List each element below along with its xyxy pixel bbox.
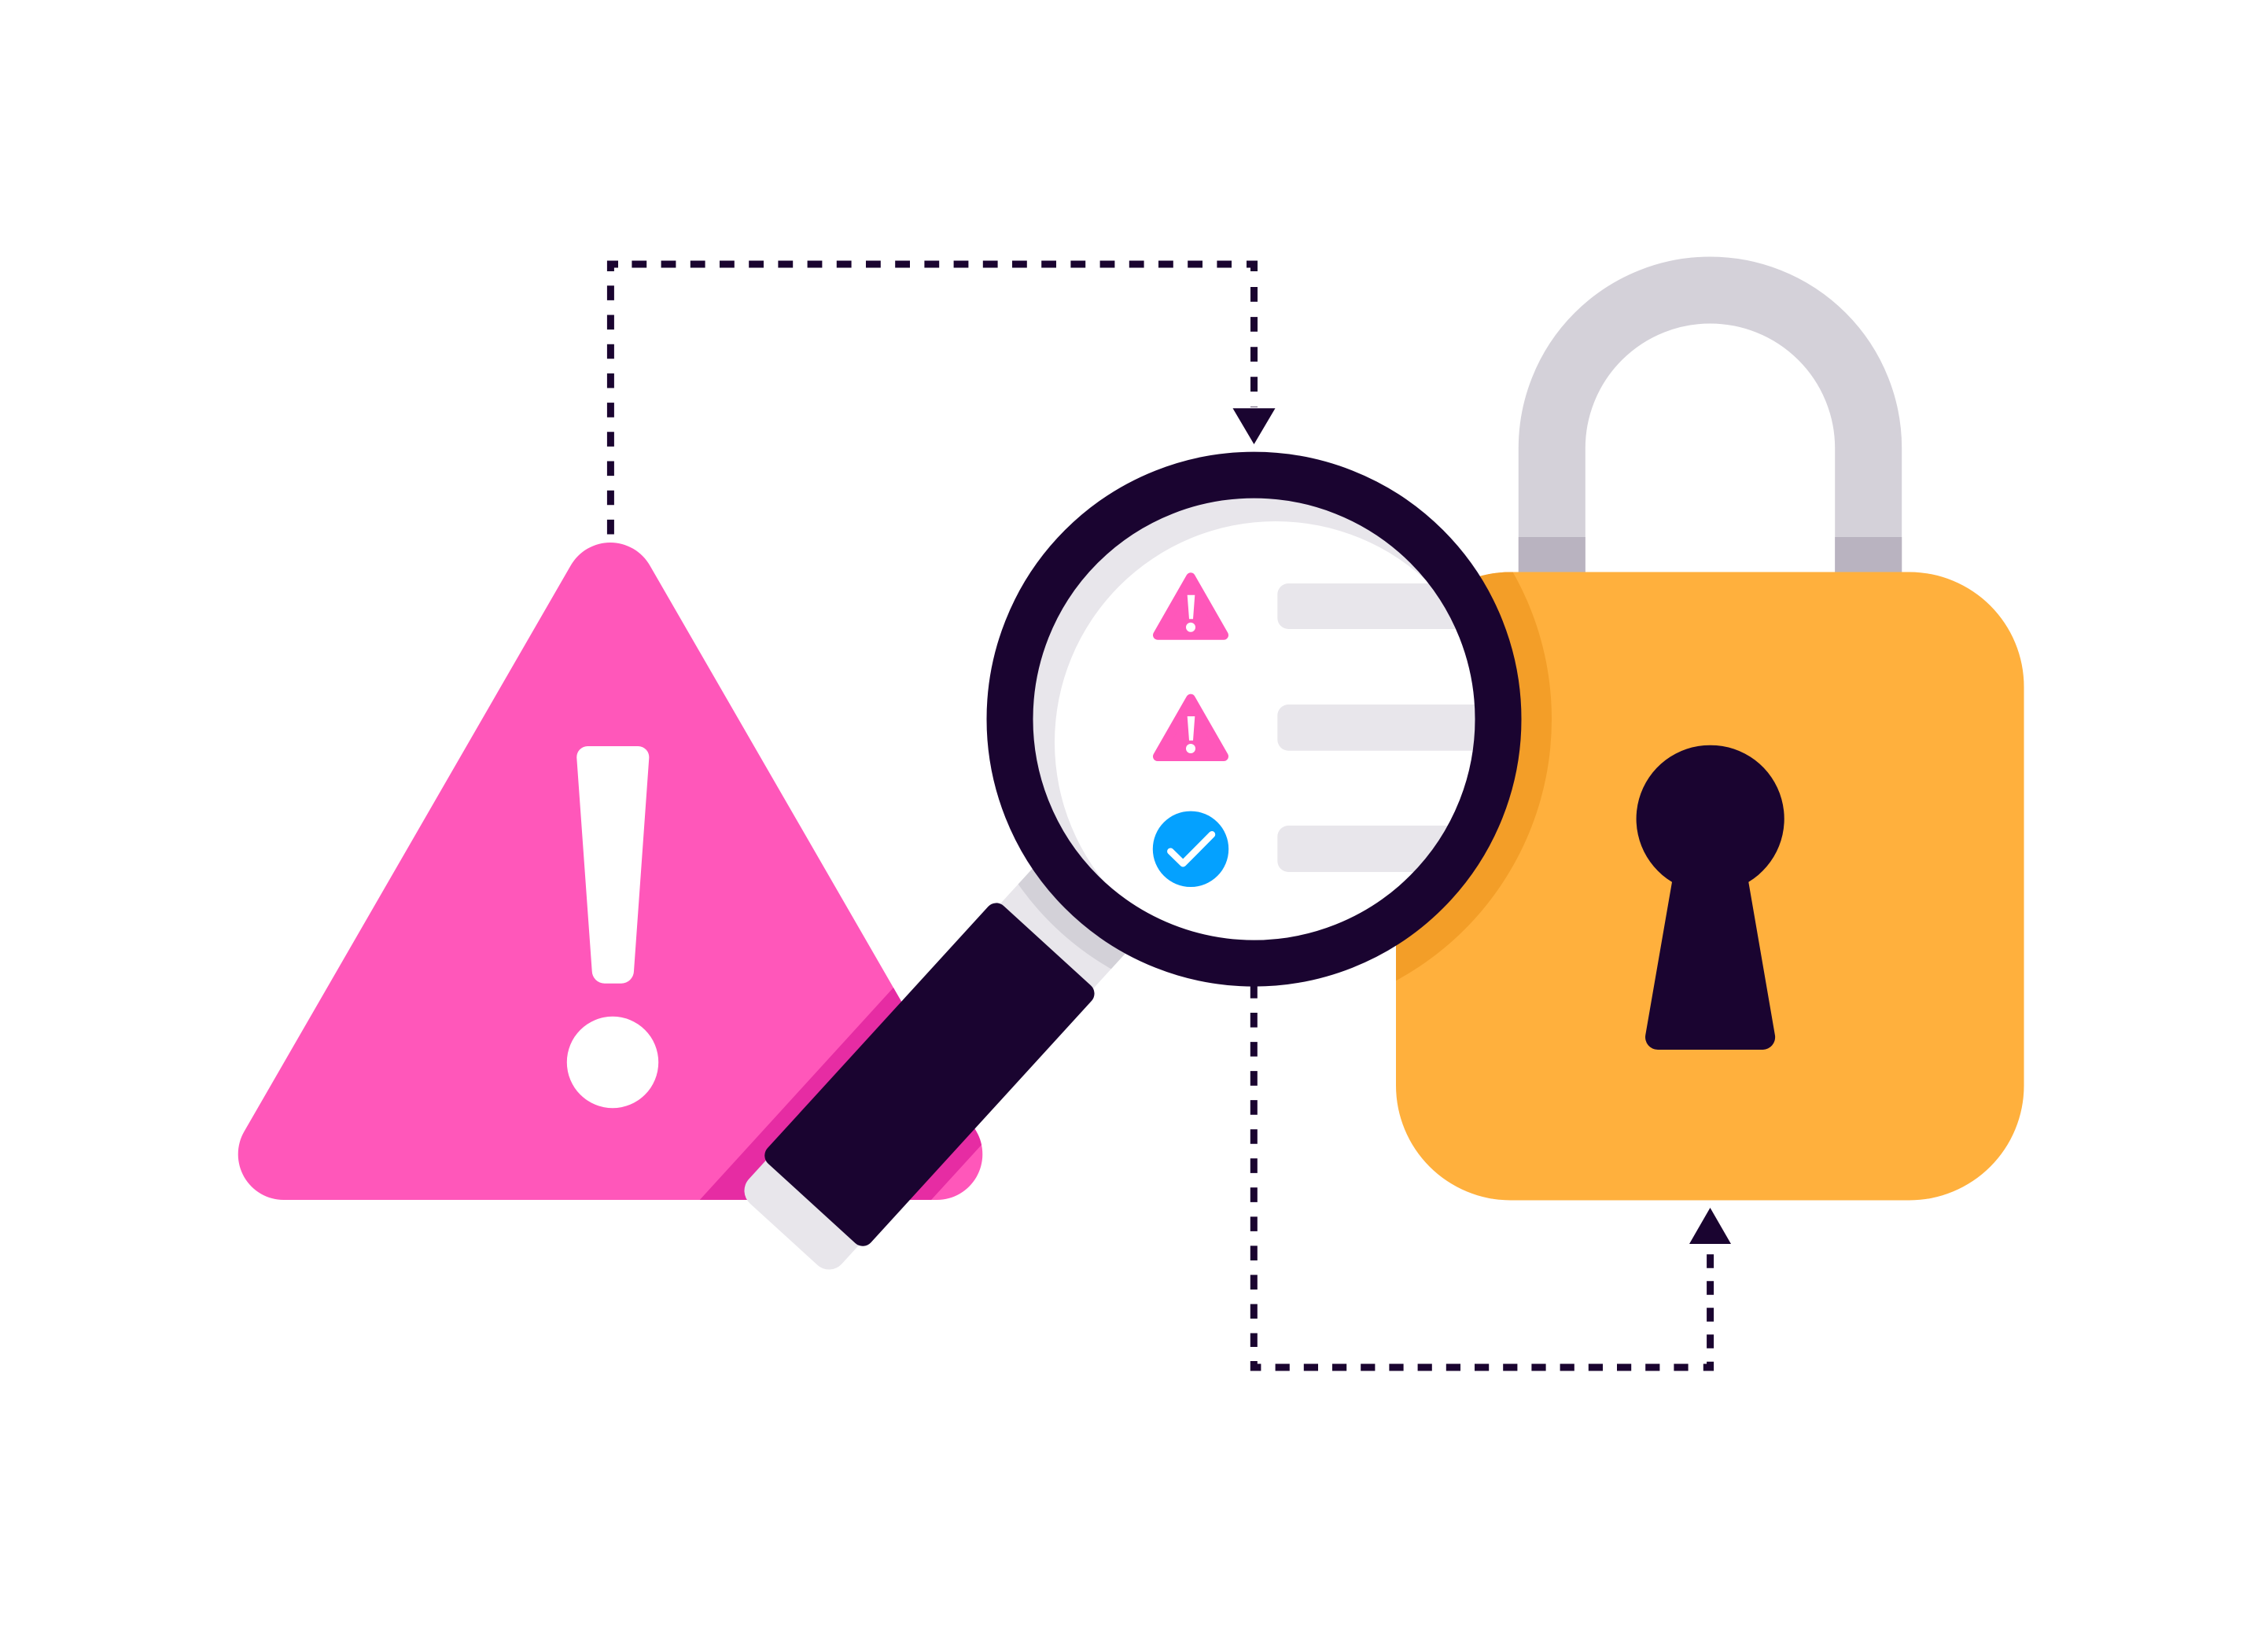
checklist rows: [1277, 583, 1475, 872]
padlock: [1396, 256, 2024, 1200]
large exclamation mark: [567, 746, 658, 1108]
illustration: warning triangle, magnifying glass, padlock: [238, 256, 2024, 1371]
lens shadow on padlock: [1396, 572, 1552, 981]
padlock body: [1396, 572, 2024, 1200]
arrow: triangle to magnifier: [610, 264, 1276, 535]
warning triangle: [238, 543, 983, 1200]
icon: warning 1: [1158, 577, 1224, 635]
magnifier shaft: [744, 869, 1125, 1269]
magnifying glass: [737, 432, 1592, 1277]
lens ring: [1010, 475, 1498, 963]
arrow: magnifier to padlock: [1254, 984, 1731, 1367]
icon: blue check: [1153, 811, 1228, 887]
lens glass: [1033, 499, 1475, 889]
magnifier handle: [760, 899, 1099, 1251]
keyhole: [1637, 745, 1784, 1050]
icon: warning 2: [1158, 699, 1224, 756]
handle shadow on triangle: [700, 988, 982, 1200]
padlock shackle: [1519, 290, 1902, 582]
